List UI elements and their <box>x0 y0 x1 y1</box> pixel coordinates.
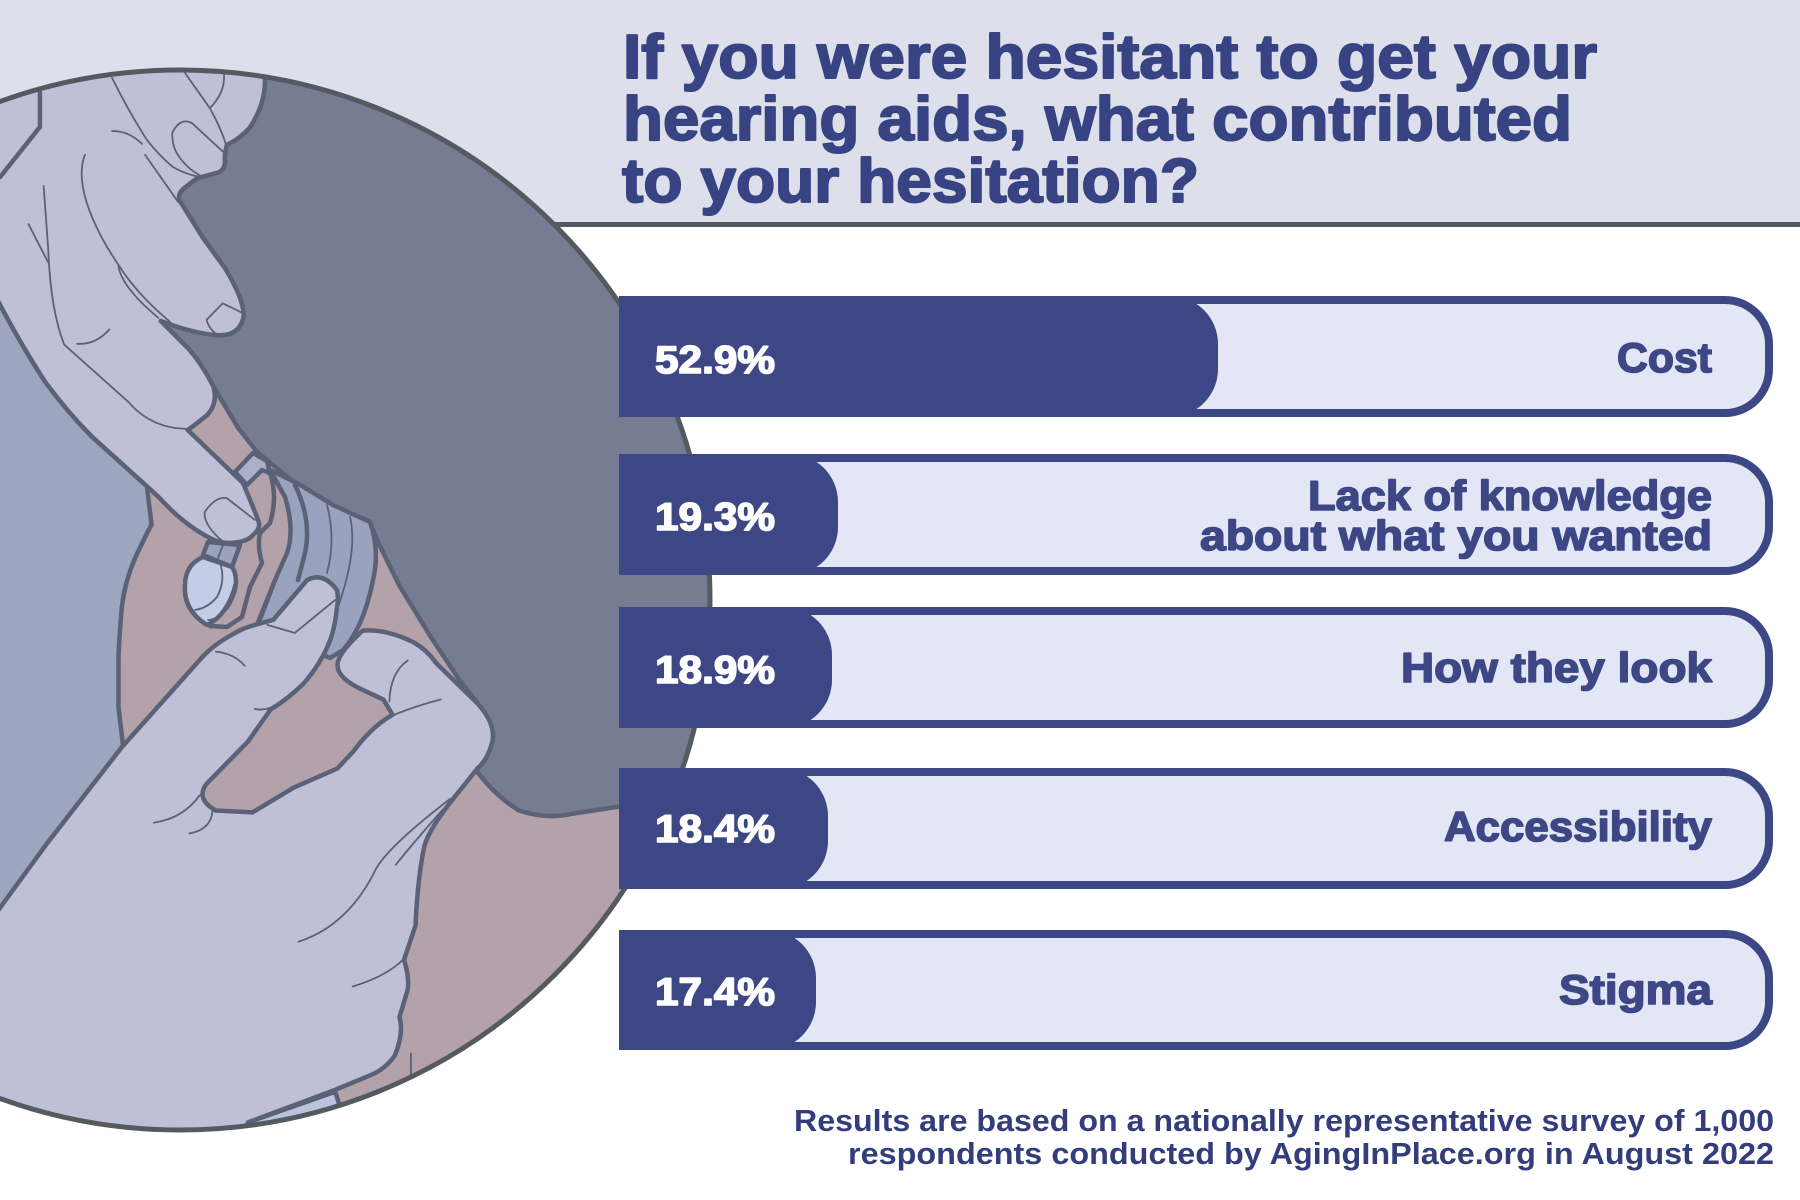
footnote <box>794 1103 1774 1171</box>
hearing aid dome <box>185 542 240 625</box>
bar: cost 52.9%: 52.9% <box>655 339 775 382</box>
title: If you were hesitant to get your <box>623 23 1597 92</box>
header band <box>0 0 1800 227</box>
lower hand <box>0 577 493 1174</box>
bar: how they look 18.9%: 18.9% <box>655 649 775 692</box>
bar: accessibility 18.4% <box>619 768 1773 889</box>
bar: lack of knowledge 19.3%: 19.3% <box>655 496 775 539</box>
bar: how they look 18.9% <box>619 607 1773 728</box>
bar: cost 52.9% <box>619 296 1773 417</box>
bar: accessibility 18.4%: Accessibility <box>1444 803 1713 850</box>
title: hearing aids, what contributed <box>623 85 1572 154</box>
blue sleeve piece <box>254 1091 341 1122</box>
bar: lack of knowledge 19.3% <box>619 454 1773 575</box>
hair <box>170 80 708 818</box>
hearing aid bands <box>235 453 376 658</box>
footnote: Results are based on a nationally representative survey of 1,000 <box>794 1103 1774 1138</box>
bar: lack of knowledge 19.3%: Lack of knowledge <box>1308 472 1712 519</box>
illustration circle outline <box>0 70 710 1130</box>
bar: stigma 17.4%: 17.4% <box>655 971 775 1014</box>
bar: accessibility 18.4%: 18.4% <box>655 808 775 851</box>
bar: cost 52.9%: Cost <box>1617 334 1712 381</box>
title <box>622 23 1597 216</box>
shirt <box>0 287 152 911</box>
title: to your hesitation? <box>622 147 1199 216</box>
upper hand <box>0 50 265 543</box>
bar: lack of knowledge 19.3%: about what you wanted <box>1200 512 1712 559</box>
bar: stigma 17.4%: Stigma <box>1559 966 1713 1013</box>
bar: stigma 17.4% <box>619 930 1773 1050</box>
illustration: hands fitting a hearing aid <box>0 72 708 1128</box>
ear outline <box>210 473 274 627</box>
footnote: respondents conducted by AgingInPlace.org in August 2022 <box>848 1136 1774 1171</box>
bar: how they look 18.9%: How they look <box>1401 644 1713 691</box>
